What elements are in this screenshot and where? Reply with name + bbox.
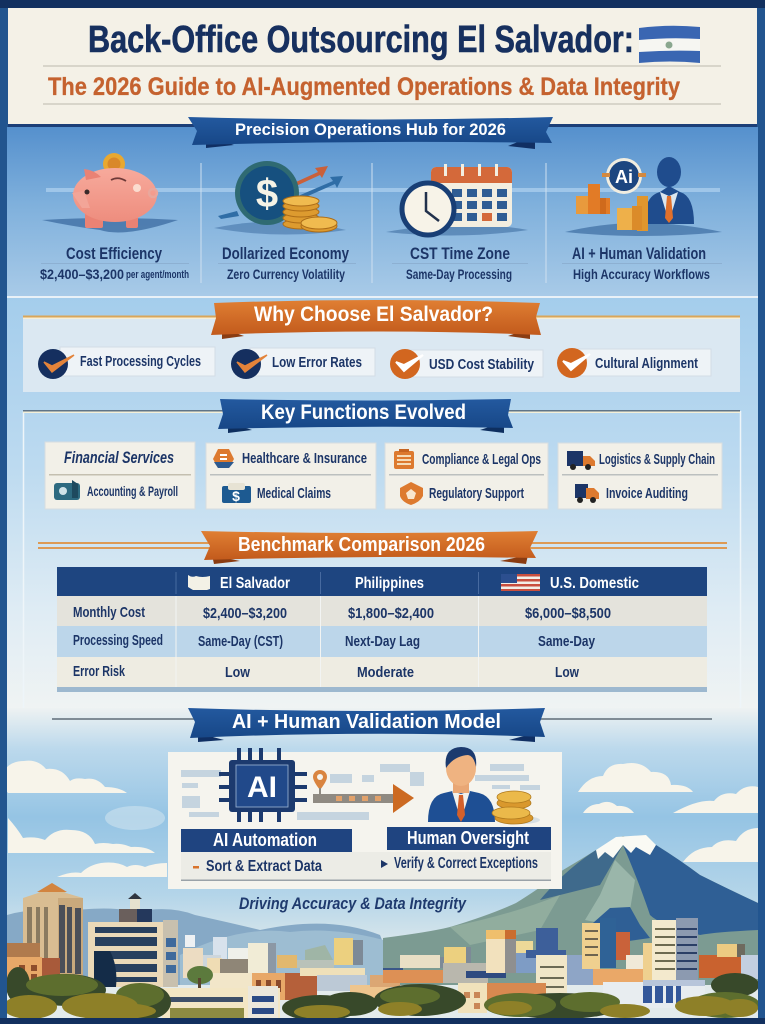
icon: medical claims bag xyxy=(222,483,251,504)
subtitle: The 2026 Guide to AI-Augmented Operations & Data Integrity xyxy=(48,73,680,101)
table: benchmark comparison: Next-Day Lag xyxy=(345,633,420,650)
stat: cost efficiency: per agent/month xyxy=(126,269,189,281)
icon: El Salvador mark xyxy=(188,575,210,590)
icon: dollar and coins: $ xyxy=(256,172,278,216)
item: cultural alignment xyxy=(557,348,711,378)
banner: why choose: Why Choose El Salvador? xyxy=(254,303,493,326)
card: logistics and supply chain xyxy=(558,443,722,509)
panel: precision operations hub xyxy=(7,117,758,298)
stat: AI + human validation: AI + Human Validation xyxy=(572,244,706,263)
center left building xyxy=(88,893,178,987)
mid skyline right xyxy=(383,918,758,1013)
icon: AI and human: Ai xyxy=(615,167,633,187)
arrow: AI to human xyxy=(313,770,414,813)
stat: AI + human validation xyxy=(562,244,722,282)
icon: AI chip: AI xyxy=(247,771,277,804)
stat: CST time zone: Same-Day Processing xyxy=(406,266,512,282)
card: healthcare and insurance: Medical Claims xyxy=(257,485,331,502)
label: human oversight: Human Oversight xyxy=(407,828,529,848)
card: logistics and supply chain: Invoice Auditing xyxy=(606,485,688,502)
table: benchmark comparison: Philippines xyxy=(355,575,424,592)
card: compliance and legal ops: Compliance & Legal Ops xyxy=(422,451,541,468)
title: Back-Office Outsourcing El Salvador: xyxy=(88,19,634,61)
banner: key functions xyxy=(218,399,513,433)
left low building xyxy=(7,943,60,987)
icon: AI chip xyxy=(219,748,307,822)
left tower xyxy=(23,883,83,978)
item: USD cost stability: USD Cost Stability xyxy=(429,357,534,373)
icon: invoice truck xyxy=(575,484,599,503)
table: benchmark comparison: Moderate xyxy=(357,664,414,681)
stat: dollarized economy xyxy=(218,244,356,282)
data fragments xyxy=(181,764,540,820)
table: benchmark comparison: $6,000–$8,500 xyxy=(525,605,611,622)
stat: cost efficiency xyxy=(40,244,189,282)
item: USD cost stability xyxy=(390,349,543,379)
icon: AI and human xyxy=(565,157,722,236)
stat: CST time zone xyxy=(392,244,528,282)
icon: clipboard xyxy=(394,449,414,469)
stat: AI + human validation: High Accuracy Workflows xyxy=(573,266,710,282)
item: low error rates: Low Error Rates xyxy=(272,355,362,371)
item: fast processing cycles xyxy=(38,347,215,379)
panel: key functions evolved xyxy=(23,399,740,708)
banner: AI + human xyxy=(188,708,545,742)
table: benchmark comparison: U.S. Domestic xyxy=(550,575,639,592)
clouds xyxy=(0,761,758,877)
icon: piggy bank xyxy=(42,153,178,232)
item: fast processing cycles: Fast Processing Cycles xyxy=(80,354,201,370)
panel: AI + human validation model xyxy=(52,708,712,913)
icon: medical claims bag: $ xyxy=(232,488,240,504)
table: benchmark comparison: Processing Speed xyxy=(73,632,163,649)
distant hills xyxy=(7,908,400,985)
banner: precision operations hub xyxy=(188,117,553,149)
card: financial services: Financial Services xyxy=(64,448,174,467)
icon: shield xyxy=(400,482,423,505)
table: benchmark comparison xyxy=(57,567,707,692)
card: financial services: Accounting & Payroll xyxy=(87,483,178,499)
icon: US flag xyxy=(501,574,540,591)
landscape scene xyxy=(0,708,760,1021)
low building foreground xyxy=(162,986,280,1018)
table: benchmark comparison: $1,800–$2,400 xyxy=(348,605,434,622)
tagline: Driving Accuracy & Data Integrity xyxy=(239,894,467,913)
stat: dollarized economy: Zero Currency Volatility xyxy=(227,266,345,282)
icon: dollar and coins xyxy=(214,161,346,235)
banner: benchmark xyxy=(201,531,538,564)
text: verify and correct: Verify & Correct Exceptions xyxy=(394,855,538,872)
trees xyxy=(3,967,760,1021)
panel: header xyxy=(8,8,757,127)
mid skyline left xyxy=(183,935,400,1005)
stat: CST time zone: CST Time Zone xyxy=(410,244,510,263)
table: benchmark comparison: Error Risk xyxy=(73,663,125,680)
table: benchmark comparison: Low xyxy=(225,664,250,681)
card: financial services xyxy=(45,442,195,509)
stat: dollarized economy: Dollarized Economy xyxy=(222,244,349,263)
text: verify and correct xyxy=(381,855,538,872)
banner: why choose xyxy=(211,300,541,339)
panel: why choose El Salvador xyxy=(23,300,740,392)
label: AI automation: AI Automation xyxy=(213,830,317,850)
banner: AI + human: AI + Human Validation Model xyxy=(232,711,501,733)
panel: benchmark comparison xyxy=(38,531,727,692)
table: benchmark comparison: El Salvador xyxy=(220,575,290,592)
icon: delivery truck xyxy=(567,451,595,470)
card: validation diagram xyxy=(168,747,562,889)
table: benchmark comparison: Low xyxy=(555,664,579,681)
background: middle sections xyxy=(7,297,758,717)
icon: human oversight person xyxy=(428,747,495,822)
card: compliance and legal ops: Regulatory Support xyxy=(429,485,524,502)
table: benchmark comparison: Monthly Cost xyxy=(73,604,145,621)
table: benchmark comparison: Same-Day xyxy=(538,633,596,650)
stat: cost efficiency: Cost Efficiency xyxy=(66,244,162,263)
icon: healthcare hexagon xyxy=(213,449,234,468)
card: healthcare and insurance: Healthcare & Insurance xyxy=(242,450,367,467)
item: cultural alignment: Cultural Alignment xyxy=(595,356,698,372)
label: AI automation xyxy=(181,829,352,852)
icon: clock and calendar xyxy=(386,164,528,236)
banner: benchmark: Benchmark Comparison 2026 xyxy=(238,534,485,556)
card: compliance and legal ops xyxy=(385,443,548,509)
item: low error rates xyxy=(231,348,375,379)
mountain xyxy=(383,835,758,985)
icon: banknote case xyxy=(54,480,80,500)
table: benchmark comparison: Same-Day (CST) xyxy=(198,633,283,650)
table: benchmark comparison: $2,400–$3,200 xyxy=(203,605,287,622)
banner: precision operations hub: Precision Operations Hub for 2026 xyxy=(235,120,506,139)
banner: key functions: Key Functions Evolved xyxy=(261,401,466,424)
icon: El Salvador flag xyxy=(639,26,700,63)
card: healthcare and insurance xyxy=(206,443,376,509)
icon: coins xyxy=(492,791,540,824)
stat: cost efficiency: $2,400–$3,200 xyxy=(40,266,124,282)
text: sort and extract: Sort & Extract Data xyxy=(206,858,322,875)
